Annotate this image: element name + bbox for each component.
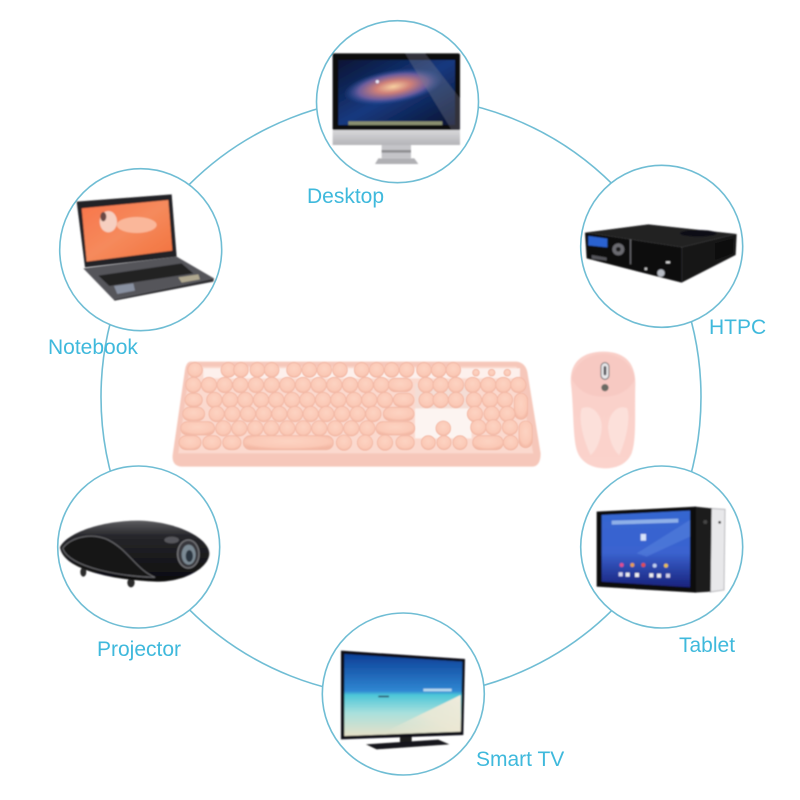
keyboard (173, 362, 541, 467)
panel: notebook (48, 169, 222, 359)
keys: home row (183, 406, 515, 422)
keys: qwerty row (185, 392, 528, 419)
connecting ring (101, 97, 701, 697)
mouse (571, 352, 635, 468)
icon: projector (60, 521, 209, 587)
panel: tablet (581, 466, 743, 657)
panel: smart TV (322, 613, 564, 775)
keys: number row (186, 377, 526, 393)
panel: desktop (307, 21, 478, 208)
label: Tablet: Tablet (679, 634, 735, 657)
keys: space row (179, 435, 518, 450)
keys: shift row (181, 420, 532, 448)
label: Smart TV: Smart TV (476, 748, 564, 771)
label: Notebook: Notebook (48, 336, 138, 359)
panel: HTPC (581, 165, 766, 339)
keys: function row (188, 363, 511, 377)
icon: desktop monitor (333, 53, 460, 164)
label: Projector: Projector (97, 638, 181, 661)
label: HTPC: HTPC (709, 316, 766, 339)
icon: television (341, 651, 465, 749)
icon: tablets (597, 507, 725, 593)
panel: projector (58, 466, 220, 661)
icon: laptop (77, 194, 214, 301)
label: Desktop: Desktop (307, 185, 384, 208)
icon: HTPC box (585, 224, 737, 283)
